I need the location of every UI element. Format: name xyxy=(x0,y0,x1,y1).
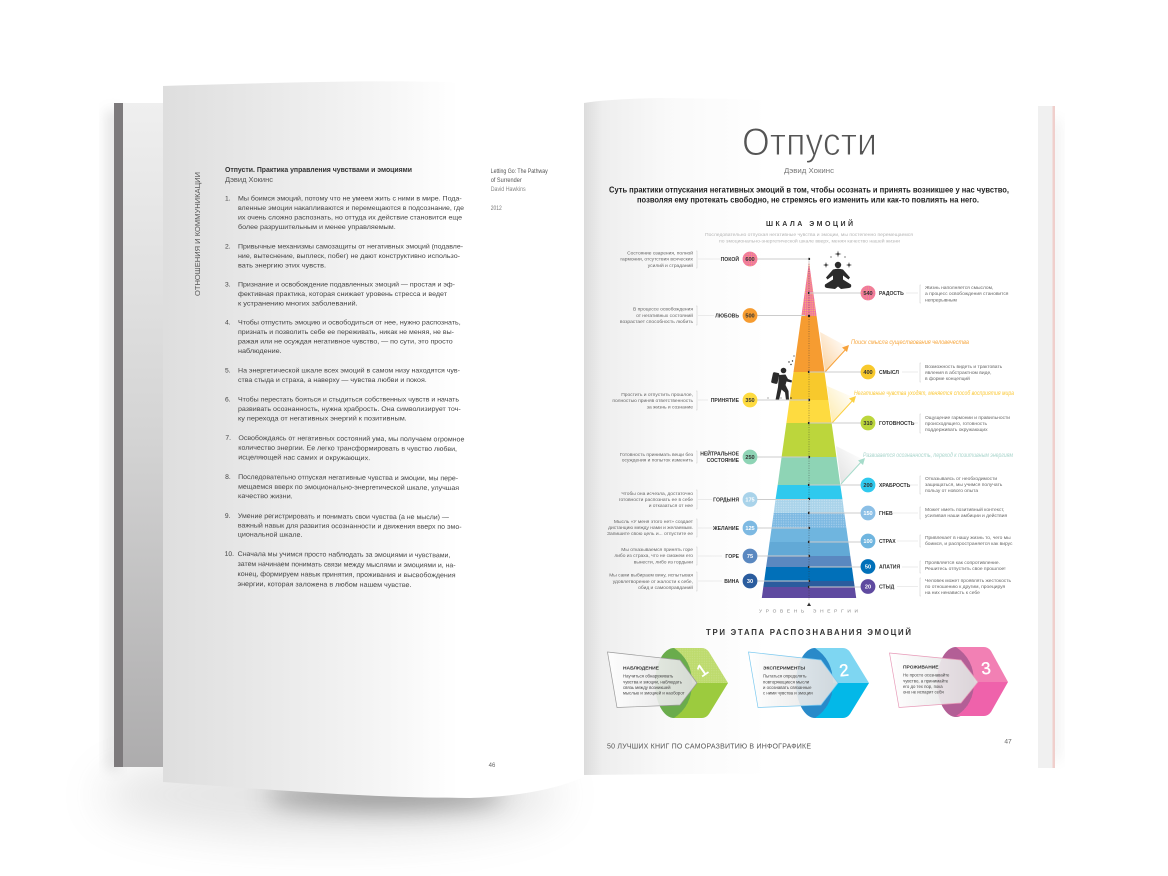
level: ВИНА 30: обид и самооправданий xyxy=(638,584,693,591)
list items 7-10, slightly tilted with the page: Последовательно отпуская негативные чувства и эмоции, мы пере- xyxy=(238,474,458,482)
level: ПОКОЙ 600: Состояние озарения, полной xyxy=(627,250,693,256)
stage 1: observation: НАБЛЮДЕНИЕ xyxy=(623,666,660,672)
level: ВИНА 30: Мы сами выбираем вину, испытывая xyxy=(609,573,693,579)
level: СТЫД 20 xyxy=(809,578,1011,596)
level: ЖЕЛАНИЕ 125 xyxy=(607,519,809,537)
stage 2: experiments xyxy=(748,648,869,718)
stage 3: experiencing: Не просто осознавайте xyxy=(903,672,950,678)
level: СМЫСЛ 400: явления в абстрактном виде, xyxy=(925,370,992,376)
level: ГНЕВ 150: усиливая наши амбиции и действия xyxy=(925,512,1007,519)
level: ГОТОВНОСТЬ 310: поддерживать окружающих xyxy=(925,428,988,433)
level: ПРИНЯТИЕ 350: полностью приняв ответственность xyxy=(612,399,693,404)
numbered list: вленные эмоции накапливаются и перемещаются в подсознание, где xyxy=(238,205,464,212)
stage 3: experiencing: чувство, а принимайте xyxy=(903,678,949,683)
original title note: 2012 xyxy=(491,205,502,212)
icon: meditating person xyxy=(823,250,852,289)
right page xyxy=(584,98,1038,775)
level: ХРАБРОСТЬ 200: пользу от нового опыта xyxy=(925,489,978,494)
original title note xyxy=(491,168,548,212)
level: НЕЙТРАЛЬНОЕ СОСТОЯНИЕ 250: осуждения и попыток изменить xyxy=(622,459,693,464)
arrow: courage xyxy=(841,458,865,484)
level: ХРАБРОСТЬ 200: 200 xyxy=(863,483,873,489)
emotion pyramid xyxy=(762,258,856,600)
numbered list: ние, вытеснение, выплеск, побег) не дают конструктивно использо- xyxy=(238,252,460,260)
level: РАДОСТЬ 540: 540 xyxy=(863,291,873,297)
level: ГНЕВ 150: 150 xyxy=(863,511,873,517)
numbered list: ражая или не осуждая негативное чувство, — по сути, это просто xyxy=(238,338,453,346)
level: ГОРЕ 75 xyxy=(614,547,809,566)
stage 1: observation xyxy=(608,648,728,718)
level: ЛЮБОВЬ 500: 500 xyxy=(745,314,755,320)
list items 7-10, slightly tilted with the page: 7. xyxy=(225,435,231,442)
arrow captions: Негативные чувства уходят, меняется способ восприятия мира xyxy=(854,391,1015,397)
list items 7-10, slightly tilted with the page: затем начинаем понимать связи между мыслями и эмоциями и, на- xyxy=(238,561,456,569)
energy axis xyxy=(808,258,810,600)
energy level axis caption xyxy=(759,602,859,614)
list items 7-10, slightly tilted with the page: исцеляющей нас самих и окружающих. xyxy=(238,453,370,462)
numbered list: 6. xyxy=(225,396,231,404)
level: ЛЮБОВЬ 500: от негативных состояний xyxy=(636,312,693,319)
level: ГОРДЫНЯ 175 xyxy=(619,490,809,509)
level: СТЫД 20: 20 xyxy=(865,584,871,590)
level: ГОРЕ 75: 75 xyxy=(747,554,753,560)
level: ПРИНЯТИЕ 350: Простить и отпустить прошлое, xyxy=(621,392,693,398)
title: Отпусти xyxy=(742,121,877,164)
footer: 50 ЛУЧШИХ КНИГ ПО САМОРАЗВИТИЮ В ИНФОГРАФИКЕ xyxy=(607,744,811,750)
level: АПАТИЯ 50: Решитесь отпустить свое прошлое! xyxy=(925,566,1006,572)
left labels xyxy=(607,250,809,591)
chart subtitle: по эмоционально-энергетической шкале вверх, меняя качество нашей жизни xyxy=(719,238,900,244)
level: РАДОСТЬ 540: Жизнь наполняется смыслом, xyxy=(925,285,993,291)
level: ГОТОВНОСТЬ 310 xyxy=(809,414,1010,433)
level: ХРАБРОСТЬ 200: защищаться, мы учимся получать xyxy=(925,483,1003,488)
level: ХРАБРОСТЬ 200: Отказываясь от необходимости xyxy=(925,476,997,482)
icon: hiker climbing xyxy=(768,355,795,400)
level: ЛЮБОВЬ 500: В процессе освобождения xyxy=(633,307,693,313)
level: СТЫД 20: СТЫД xyxy=(879,584,895,590)
level: СТЫД 20: Человек может проявлять жестокость xyxy=(925,578,1011,584)
level: РАДОСТЬ 540: непрерывным xyxy=(925,298,958,303)
level: СМЫСЛ 400 xyxy=(809,363,1003,382)
arrow halftones and arrows xyxy=(820,332,865,484)
left page xyxy=(163,81,584,798)
stage 2: experiments: Пытаться определять xyxy=(763,674,807,678)
author: Дэвид Хокинс xyxy=(784,168,835,175)
numbered list: признать и позволить себе ее переживать, никак не меняя, не вы- xyxy=(238,328,454,336)
level: РАДОСТЬ 540: РАДОСТЬ xyxy=(879,291,904,297)
numbered list: ства стыда и страха, а наверху — чувства любви и покоя. xyxy=(238,376,427,384)
level: СМЫСЛ 400: Возможность видеть и трактовать xyxy=(925,364,1003,370)
list items 7-10, slightly tilted with the page: количество энергии. Ее легко трансформировать в чувство любви, xyxy=(238,444,457,453)
level: СМЫСЛ 400: СМЫСЛ xyxy=(879,370,899,376)
numbered list: ку перехода от негативных энергий к позитивным. xyxy=(238,414,407,422)
numbered list: Привычные механизмы самозащиты от негативных эмоций (подавле- xyxy=(238,242,463,250)
level: ГОТОВНОСТЬ 310: происходящего, готовность xyxy=(925,422,987,427)
level: СМЫСЛ 400: 400 xyxy=(863,370,873,376)
numbered list: Чтобы отпустить эмоцию и освободиться от нее, нужно распознать, xyxy=(238,318,461,326)
book practice heading xyxy=(225,167,412,184)
level: ПОКОЙ 600: ПОКОЙ xyxy=(721,255,739,263)
level: ГНЕВ 150: Может иметь позитивный контекст, xyxy=(925,506,1004,513)
level: ГОРДЫНЯ 175: Чтобы она исчезла, достаточно xyxy=(621,491,693,497)
original title note: Letting Go: The Pathway xyxy=(491,168,548,175)
arrow: readiness xyxy=(832,396,856,423)
stage 3: experiencing: 3 xyxy=(980,659,992,678)
level: ГОТОВНОСТЬ 310: ГОТОВНОСТЬ xyxy=(879,421,915,427)
level: НЕЙТРАЛЬНОЕ СОСТОЯНИЕ 250: НЕЙТРАЛЬНОЕ xyxy=(700,450,740,458)
stage 3: experiencing: его до тех пор, пока xyxy=(903,684,943,689)
list items 7-10, slightly tilted with the page: конец, формируем навык принятия, проживания и высвобождения xyxy=(238,570,456,579)
level: ЛЮБОВЬ 500 xyxy=(620,306,805,325)
list items 7-10, slightly tilted with the page: циональной шкале. xyxy=(238,530,303,539)
level: НЕЙТРАЛЬНОЕ СОСТОЯНИЕ 250: Готовность принимать вещи без xyxy=(620,452,694,458)
level: ЖЕЛАНИЕ 125: дистанцию между нами и желаемым. xyxy=(608,526,693,531)
stage 1: observation: мыслью и эмоцией и наоборот xyxy=(623,690,685,696)
stage 1: observation: Научиться обнаруживать xyxy=(623,674,674,678)
original title note: of Surrender xyxy=(491,177,522,184)
level: НЕЙТРАЛЬНОЕ СОСТОЯНИЕ 250: 250 xyxy=(745,455,755,461)
level: ГОРДЫНЯ 175: 175 xyxy=(745,498,755,504)
chart heading: ШКАЛА ЭМОЦИЙ xyxy=(766,219,853,228)
level: НЕЙТРАЛЬНОЕ СОСТОЯНИЕ 250: СОСТОЯНИЕ xyxy=(707,458,740,464)
list items 7-10, slightly tilted with the page: мещаемся вверх по эмоционально-энергетической шкале, улучшая xyxy=(238,483,459,492)
level: ПОКОЙ 600: гармонии, отсутствия всяческих xyxy=(620,258,694,263)
vertical section title: ОТНОШЕНИЯ И КОММУНИКАЦИИ xyxy=(193,172,202,296)
level: ВИНА 30: ВИНА xyxy=(724,579,739,585)
list items 7-10, slightly tilted with the page: 10. xyxy=(225,551,234,558)
level: ГОРЕ 75: либо из страха, что не сможем его xyxy=(614,553,693,559)
level: ЖЕЛАНИЕ 125: Мысль «У меня этого нет» создает xyxy=(614,519,694,525)
energy level axis caption: УРОВЕНЬ ЭНЕРГИИ xyxy=(759,608,859,614)
level: ПРИНЯТИЕ 350: 350 xyxy=(745,398,755,404)
level: ЖЕЛАНИЕ 125: 125 xyxy=(745,526,755,532)
numbered list: к устранению многих заболеваний. xyxy=(238,300,358,308)
page stack, right xyxy=(1036,106,1055,768)
level: АПАТИЯ 50: АПАТИЯ xyxy=(879,564,900,570)
list items 7-10, slightly tilted with the page: Сначала мы учимся просто наблюдать за эмоциями и чувствами, xyxy=(238,550,451,559)
level: ЛЮБОВЬ 500: ЛЮБОВЬ xyxy=(715,313,739,319)
level: ПРИНЯТИЕ 350 xyxy=(612,391,809,410)
numbered list: фективная практика, которая снижает уровень стресса и ведет xyxy=(238,291,447,298)
page number 47: 47 xyxy=(1004,738,1012,746)
level: ЖЕЛАНИЕ 125: ЖЕЛАНИЕ xyxy=(712,526,740,532)
level: ГОРЕ 75: Мы отказываемся принять горе xyxy=(621,547,693,553)
level: ВИНА 30 xyxy=(609,572,809,591)
stage 1: observation: связь между возникшей xyxy=(623,685,671,690)
stage 2: experiments: с ними чувства и эмоции xyxy=(763,690,813,696)
numbered list: Мы боимся эмоций, потому что не умеем жить с ними в мире. Пода- xyxy=(238,194,462,202)
list items 7-10, slightly tilted with the page: энергии, которая заложена в любом нашем чувстве. xyxy=(237,580,412,589)
level: ПРИНЯТИЕ 350: за жизнь и сознание xyxy=(647,405,693,410)
stage 3: experiencing xyxy=(890,647,1008,717)
lead paragraph: позволяя ему протекать свободно, не стремясь его изменить или как-то повлиять на него. xyxy=(637,196,979,204)
stage 2: experiments: ЭКСПЕРИМЕНТЫ xyxy=(763,666,805,672)
level: СТЫД 20: на них ненависть к себе xyxy=(925,590,980,596)
level: ГОРДЫНЯ 175: и отказаться от нее xyxy=(649,504,693,509)
numbered list: их очень сложно распознать, но оттуда их действие становится еще xyxy=(238,214,462,222)
book practice heading: Дэвид Хокинс xyxy=(225,177,274,184)
stage 2: experiments: повторяющиеся мысли xyxy=(763,679,810,684)
level: ГОТОВНОСТЬ 310: 310 xyxy=(863,421,873,427)
stages heading: ТРИ ЭТАПА РАСПОЗНАВАНИЯ ЭМОЦИЙ xyxy=(706,628,911,637)
level: АПАТИЯ 50 xyxy=(809,559,1006,574)
arrow captions: Поиск смысла существования человечества xyxy=(851,340,970,346)
numbered list: На энергетической шкале всех эмоций в самом низу находятся чув- xyxy=(238,366,460,374)
numbered list: 4. xyxy=(225,320,231,326)
level: ВИНА 30: 30 xyxy=(747,579,753,585)
list items 7-10, slightly tilted with the page: Освобождаясь от негативных состояний ума, мы получаем огромное xyxy=(238,434,465,443)
level: СТРАХ 100: боимся, и распространяется как вирус xyxy=(925,541,1013,547)
level: ГНЕВ 150: ГНЕВ xyxy=(879,511,893,517)
level: ПОКОЙ 600: 600 xyxy=(745,257,755,263)
level: РАДОСТЬ 540: а процесс освобождения становится xyxy=(925,291,1009,297)
level: РАДОСТЬ 540 xyxy=(809,285,1009,303)
stage 1: observation: чувства и эмоции, наблюдать xyxy=(623,679,683,684)
arrow captions: Развивается осознанность, переход к позитивным энергиям xyxy=(863,453,1013,459)
numbered list: Чтобы перестать бояться и стыдиться собственных чувств и начать xyxy=(238,396,460,404)
arrow: meaning xyxy=(825,345,849,372)
level: ГОТОВНОСТЬ 310: Ощущение гармонии и правильности xyxy=(925,415,1010,421)
numbered list: 2. xyxy=(225,244,231,250)
stage 3: experiencing: оно не испарит себя xyxy=(903,690,944,694)
stage 3: experiencing: ПРОЖИВАНИЕ xyxy=(903,664,939,670)
right labels xyxy=(809,285,1013,596)
stage 1: observation: 1 xyxy=(693,660,712,681)
page number 46: 46 xyxy=(489,763,496,769)
book shadow xyxy=(100,110,1060,837)
lead paragraph: Суть практики отпускания негативных эмоций в том, чтобы осознать и принять возникшее у нас чувство, xyxy=(609,186,1009,194)
level: СТЫД 20: по отношению к другим, проецируя xyxy=(925,585,1006,590)
numbered list: наблюдение. xyxy=(238,347,282,355)
chart subtitle: Последовательно отпуская негативные чувства и эмоции, мы постепенно перемещаемся xyxy=(705,232,913,238)
stage 2: experiments: и осознавать связанные xyxy=(763,685,812,690)
numbered list: развивать осознанность, нужна храбрость. Она символизирует точ- xyxy=(238,405,461,413)
list items 7-10, slightly tilted with the page: важный навык для развития осознанности и движения вверх по эмо- xyxy=(238,521,462,531)
numbered list: 5. xyxy=(225,368,231,374)
numbered list: Признание и освобождение подавленных эмоций — простая и эф- xyxy=(238,280,455,288)
level: СМЫСЛ 400: в форме концепций xyxy=(925,375,970,382)
level: СТРАХ 100: СТРАХ xyxy=(879,539,896,545)
stage 2: experiments: 2 xyxy=(838,661,850,680)
level: ГОРЕ 75: ГОРЕ xyxy=(725,554,740,560)
level: АПАТИЯ 50: 50 xyxy=(865,564,871,570)
level: ХРАБРОСТЬ 200 xyxy=(809,476,1003,494)
list items 7-10, slightly tilted with the page: качество жизни. xyxy=(238,493,293,500)
chart subtitle xyxy=(705,232,913,244)
level: ГОРДЫНЯ 175: ГОРДЫНЯ xyxy=(713,497,739,503)
level: ПОКОЙ 600: усилий и страданий xyxy=(648,262,693,269)
book practice heading: Отпусти. Практика управления чувствами и эмоциями xyxy=(225,167,412,174)
list items 7-10, slightly tilted with the page xyxy=(224,434,465,589)
level: СТРАХ 100 xyxy=(809,534,1013,548)
lead paragraph xyxy=(609,186,1009,204)
numbered list: более разрушительным и менее управляемым. xyxy=(238,223,396,231)
numbered list: 3. xyxy=(225,282,231,288)
level: ПРИНЯТИЕ 350: ПРИНЯТИЕ xyxy=(711,398,740,404)
level: ГОРДЫНЯ 175: готовности распознать ее в себе xyxy=(619,497,693,503)
numbered list: вать энергию этих чувств. xyxy=(238,262,326,270)
level: ЖЕЛАНИЕ 125: Запишите свою цель и... отпустите ее xyxy=(607,531,693,537)
level: СТРАХ 100: 100 xyxy=(863,539,873,545)
level: СТРАХ 100: Привлекает в нашу жизнь то, чего мы xyxy=(925,535,1011,541)
list items 7-10, slightly tilted with the page: 9. xyxy=(225,513,231,520)
back page block, left xyxy=(114,103,166,767)
level: ЛЮБОВЬ 500: возрастает способность любить xyxy=(620,319,693,325)
level: НЕЙТРАЛЬНОЕ СОСТОЯНИЕ 250 xyxy=(620,450,809,464)
list items 7-10, slightly tilted with the page: Умение регистрировать и понимать свои чувства (а не мысли) — xyxy=(238,513,449,521)
arrow captions xyxy=(851,340,1015,459)
level: ХРАБРОСТЬ 200: ХРАБРОСТЬ xyxy=(879,483,911,489)
level: ВИНА 30: удовлетворение от жалости к себе, xyxy=(613,579,693,585)
numbered list: 1. xyxy=(225,196,231,202)
level: ГОРЕ 75: вынести, либо из гордыни xyxy=(634,560,693,566)
list items 7-10, slightly tilted with the page: 8. xyxy=(225,474,231,481)
numbered list xyxy=(224,194,465,589)
level: АПАТИЯ 50: Проявляется как сопротивление. xyxy=(925,560,1000,566)
level: ПОКОЙ 600 xyxy=(620,250,809,269)
original title note: David Hawkins xyxy=(491,186,526,193)
level: ГНЕВ 150 xyxy=(809,506,1007,520)
